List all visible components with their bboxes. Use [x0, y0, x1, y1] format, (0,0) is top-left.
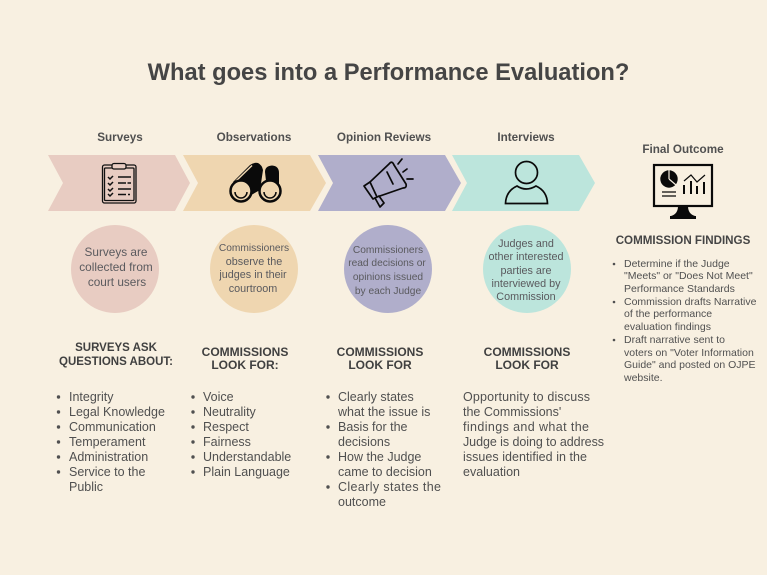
circle: surveys	[71, 225, 159, 313]
list: survey topics	[57, 390, 165, 494]
list: opinion criteria: Basis for the	[338, 420, 408, 434]
list: findings: voters on "Voter Information	[624, 347, 754, 359]
column: interviews	[452, 131, 604, 479]
list: findings: of the performance	[624, 308, 712, 320]
column: surveys	[48, 131, 190, 494]
list: opinion criteria: decisions	[338, 435, 390, 449]
circle text: opinion reviews: by each Judge	[355, 286, 421, 297]
column: observations	[183, 131, 326, 479]
circle text: opinion reviews	[348, 245, 426, 297]
circle text: interviews: other interested	[488, 251, 564, 263]
list: survey topics: Legal Knowledge	[69, 405, 165, 419]
circle text: opinion reviews: read decisions or	[348, 258, 426, 269]
subheading: commissions look for: COMMISSIONS	[484, 345, 570, 359]
circle text: interviews: Judges and	[498, 238, 554, 250]
circle text: observations: observe the	[226, 256, 282, 268]
list: findings: Guide" and posted on OJPE	[624, 359, 756, 371]
list: observation criteria: Plain Language	[203, 465, 290, 479]
circle text: surveys: Surveys are	[85, 245, 148, 259]
list: opinion criteria: came to decision	[338, 465, 432, 479]
chevron: interviews	[452, 155, 595, 211]
list: observation criteria: Neutrality	[203, 405, 257, 419]
list: findings: website.	[623, 372, 663, 384]
column: final outcome	[613, 143, 757, 384]
circle: observations	[210, 225, 298, 313]
text block: opportunity to discuss: Judge is doing to address	[463, 435, 604, 449]
subheading: commissions look for: COMMISSIONS	[202, 345, 288, 359]
list: observation criteria: Fairness	[203, 435, 251, 449]
heading: final outcome: Final Outcome	[642, 143, 724, 156]
circle text: surveys: court users	[88, 275, 146, 289]
list: opinion criteria: outcome	[338, 495, 386, 509]
list: findings: evaluation findings	[624, 321, 711, 333]
circle text: interviews	[488, 238, 564, 303]
list: observation criteria: Respect	[203, 420, 249, 434]
list: opinion criteria: Clearly states	[338, 390, 414, 404]
circle text: surveys: collected from	[79, 260, 153, 274]
text block: opportunity to discuss: findings and what the	[463, 420, 589, 434]
chevron: surveys	[48, 155, 190, 211]
text block: opportunity to discuss: issues identified in the	[463, 450, 587, 464]
list: survey topics: Communication	[69, 420, 156, 434]
circle text: observations	[218, 243, 289, 295]
circle: interviews	[483, 225, 571, 313]
text block: opportunity to discuss	[463, 390, 604, 479]
circle text: observations: courtroom	[229, 283, 277, 295]
list: opinion criteria: Clearly states the	[338, 480, 441, 494]
subheading: commissions look for: LOOK FOR	[348, 358, 412, 372]
list: findings	[613, 258, 757, 384]
icon: monitor with charts	[654, 165, 712, 219]
list: observation criteria	[191, 390, 291, 479]
list: observation criteria: Understandable	[203, 450, 291, 464]
circle text: interviews: parties are	[500, 265, 552, 277]
subheading: commissions look for: LOOK FOR:	[211, 358, 279, 372]
subheading: commissions look for: LOOK FOR	[495, 358, 559, 372]
heading: observations: Observations	[217, 131, 292, 144]
subheading: commissions look for: COMMISSIONS	[337, 345, 423, 359]
circle text: interviews: Commission	[496, 291, 556, 303]
subheading: commissions look for	[484, 345, 570, 372]
text block: opportunity to discuss: evaluation	[463, 465, 520, 479]
list: survey topics: Service to the	[69, 465, 145, 479]
circle: opinion reviews	[344, 225, 432, 313]
icon: megaphone	[364, 159, 413, 207]
list: findings: Determine if the Judge	[624, 258, 730, 270]
list: findings: Commission drafts Narrative	[624, 296, 757, 308]
list: opinion criteria: How the Judge	[338, 450, 421, 464]
icon: binoculars	[230, 163, 280, 202]
heading: surveys: Surveys	[97, 131, 143, 144]
list: survey topics: Administration	[69, 450, 148, 464]
text block: opportunity to discuss: Opportunity to discuss	[463, 390, 590, 404]
circle text: observations: Commissioners	[219, 243, 289, 254]
text block: opportunity to discuss: the Commissions'	[463, 405, 561, 419]
list: observation criteria: Voice	[203, 390, 234, 404]
subheading: surveys ask: SURVEYS ASK	[75, 342, 158, 354]
column: opinion reviews	[318, 131, 461, 509]
list: survey topics: Public	[69, 480, 103, 494]
subheading: commissions look for	[337, 345, 423, 372]
icon: clipboard checklist	[102, 164, 136, 203]
circle text: interviews: interviewed by	[491, 278, 561, 290]
list: survey topics: Temperament	[69, 435, 146, 449]
subheading: commission findings: COMMISSION FINDINGS	[616, 234, 751, 247]
chevron: observations	[183, 155, 326, 211]
circle text: observations: judges in their	[218, 269, 287, 281]
subheading: surveys ask: QUESTIONS ABOUT:	[59, 356, 173, 368]
list: opinion criteria	[326, 390, 441, 509]
title: What goes into a Performance Evaluation?	[148, 60, 629, 86]
heading: opinion reviews: Opinion Reviews	[337, 131, 432, 144]
circle text: opinion reviews: opinions issued	[353, 272, 423, 283]
circle text: surveys	[79, 245, 153, 289]
icon: person	[506, 162, 548, 204]
list: findings: Performance Standards	[624, 283, 735, 295]
chevron: opinion reviews	[318, 155, 461, 211]
heading: interviews: Interviews	[497, 131, 555, 144]
circle text: opinion reviews: Commissioners	[353, 245, 423, 256]
list: findings: "Meets" or "Does Not Meet"	[624, 270, 753, 282]
list: survey topics: Integrity	[69, 390, 114, 404]
list: opinion criteria: what the issue is	[337, 405, 430, 419]
list: findings: Draft narrative sent to	[624, 334, 725, 346]
subheading: commissions look for	[202, 345, 288, 372]
subheading: surveys ask	[59, 342, 173, 368]
